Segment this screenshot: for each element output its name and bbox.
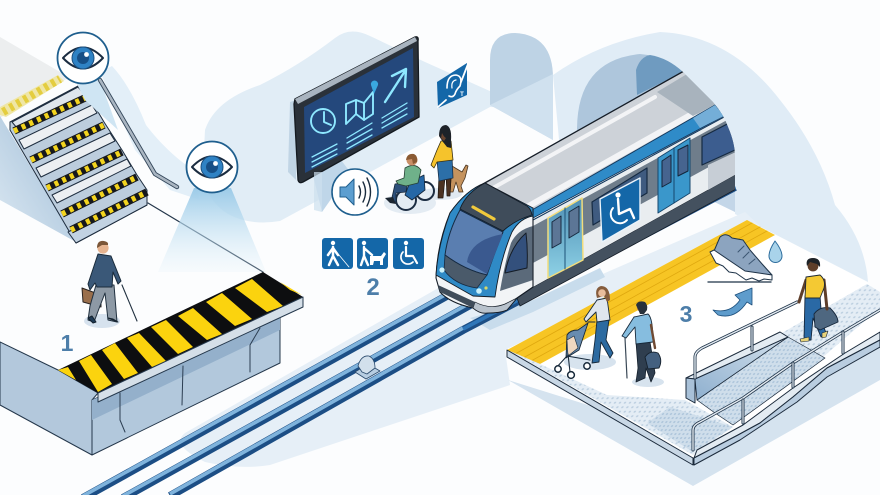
roof [486, 72, 713, 208]
person in wheelchair [384, 154, 436, 214]
light cone: eye 1 [75, 80, 118, 130]
front wall [92, 318, 280, 455]
far doors [658, 138, 690, 213]
highlighted doors [548, 198, 583, 278]
head [637, 302, 647, 312]
background: eye swoosh [100, 66, 200, 200]
woman with guide dog [418, 125, 468, 200]
skirt [517, 172, 740, 306]
headlights [439, 267, 445, 273]
sign: white cane [322, 238, 353, 269]
chair back [405, 175, 425, 200]
cab top [460, 183, 532, 231]
rear rail [695, 302, 797, 378]
far grey panel [708, 152, 735, 190]
ramp [686, 302, 880, 450]
icon: eye 2 [186, 142, 238, 192]
head [406, 154, 418, 166]
platform 1 [0, 272, 303, 455]
stair side wall [0, 116, 76, 242]
info lines [312, 103, 407, 167]
ramp inner wall [695, 337, 788, 400]
ramp kerb strip [694, 332, 880, 458]
hearing loop sign [437, 63, 468, 108]
accessibility sign row [322, 238, 424, 269]
torso [622, 314, 653, 344]
icon: eye 1 [58, 32, 108, 84]
background: concourse wall [203, 31, 540, 222]
handrail [100, 80, 177, 187]
icon: shoe and water drop [708, 235, 782, 282]
hazard nosing [14, 97, 147, 230]
briefcase [82, 288, 101, 307]
track switch box [355, 356, 380, 379]
lower cab [473, 298, 517, 313]
ramp side wall [686, 332, 788, 379]
floor edge line [148, 203, 263, 272]
number 2: 2 [366, 274, 380, 301]
icon: speaker [332, 169, 378, 215]
head [97, 242, 109, 254]
legs [592, 320, 613, 363]
head and hair [596, 286, 610, 302]
torso [396, 165, 421, 186]
icon: arrow [385, 69, 406, 102]
person with white cane [82, 241, 137, 328]
number 3: 3 [680, 301, 692, 327]
train [436, 62, 740, 313]
arm [651, 325, 655, 348]
headlight strip [473, 207, 494, 219]
wheelchair sign [600, 178, 640, 242]
arms [799, 280, 827, 309]
torso [88, 254, 121, 290]
stroller [566, 323, 588, 358]
man on ramp [799, 258, 838, 342]
number 1: 1 [61, 330, 74, 356]
bag [814, 308, 838, 330]
platform floor [507, 220, 880, 458]
pale beam: speaker [313, 152, 350, 212]
digital display [288, 37, 419, 183]
landing warning stripe [0, 75, 64, 117]
background: tunnel wall [553, 32, 868, 282]
legs [88, 285, 117, 322]
man with cane [622, 301, 664, 387]
top [431, 141, 453, 168]
arrow: step up [713, 288, 752, 316]
platform nosing [98, 297, 303, 402]
legs [804, 296, 826, 340]
cab base [436, 183, 533, 313]
windshield [445, 210, 503, 275]
side window [505, 233, 527, 273]
yellow tactile strip [507, 220, 775, 364]
torso [805, 275, 824, 298]
arch: left passage [490, 33, 553, 140]
pale beam front [314, 172, 322, 212]
hazard edge band [58, 272, 303, 393]
front rail [693, 310, 880, 450]
left wall [0, 342, 98, 455]
skirt [437, 157, 453, 181]
legs [636, 342, 655, 382]
steps [10, 85, 147, 243]
tunnel opening [577, 54, 735, 212]
background: track band [180, 212, 760, 467]
nose [444, 255, 487, 288]
side panel [500, 226, 533, 291]
sign: guide dog [357, 238, 388, 269]
blue stripe [532, 105, 724, 218]
tactile paving [510, 351, 733, 455]
far window [702, 120, 735, 165]
mid window [592, 168, 647, 225]
upper landing [0, 37, 68, 118]
head and hair [439, 125, 451, 148]
legs [391, 182, 408, 202]
shadow: platform 3 [508, 335, 880, 486]
blue cab frame [436, 183, 533, 297]
icon: map [346, 92, 373, 124]
bag [645, 352, 661, 369]
platform 3 [507, 220, 880, 465]
train floor shadow [470, 268, 605, 330]
sign: wheelchair [393, 238, 424, 269]
staircase [0, 37, 147, 243]
icon: clock [311, 69, 407, 167]
cracks [120, 328, 260, 432]
torso [584, 298, 610, 322]
woman with stroller [555, 286, 616, 378]
edge [507, 350, 693, 465]
lower body [533, 108, 740, 287]
rear wheel [396, 190, 416, 210]
railway tracks [83, 186, 735, 495]
window band [533, 113, 740, 263]
head [808, 261, 818, 271]
light cone: eye 2 [158, 188, 266, 272]
roof highlights [493, 97, 655, 188]
cab seam [532, 210, 533, 280]
hearing loop sign: T [460, 92, 464, 98]
dog [450, 165, 468, 192]
legs [438, 175, 451, 198]
